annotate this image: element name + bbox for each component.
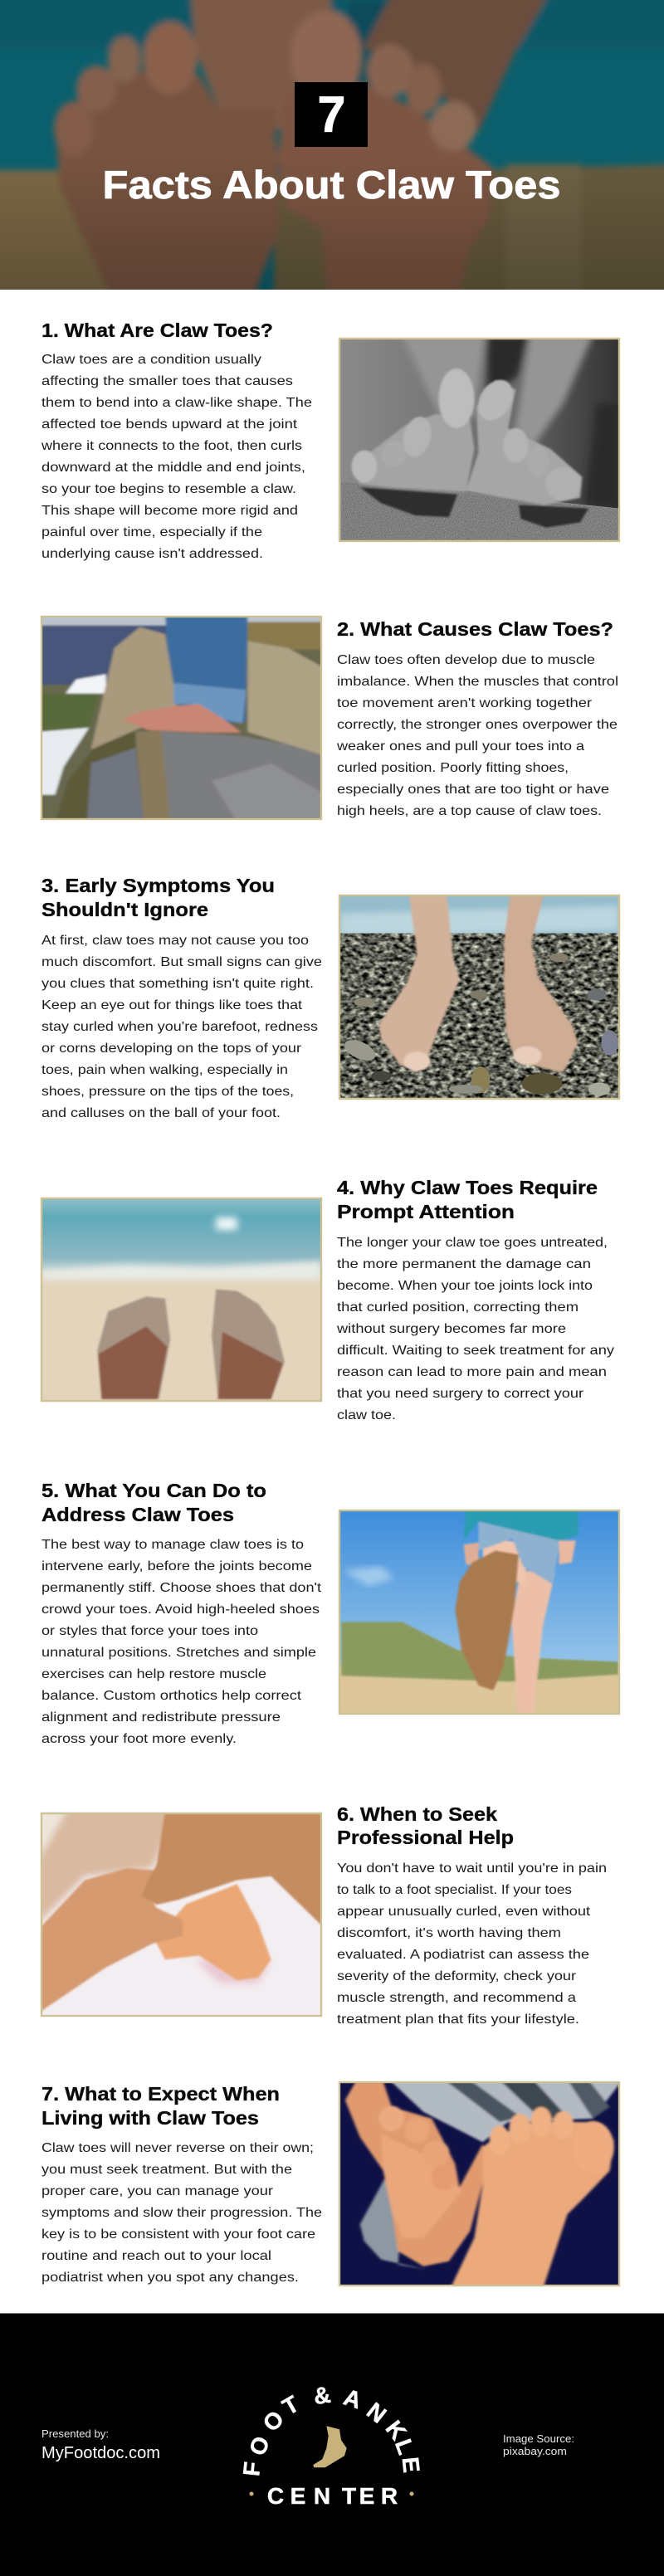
text block 5: exercises can help restore muscle	[42, 1667, 266, 1681]
text block 3: toes, pain when walking, especially in	[42, 1063, 288, 1077]
logo arc text: L	[390, 2436, 419, 2458]
heading 6: Professional Help	[337, 1827, 514, 1848]
logo word center: T	[342, 2483, 356, 2509]
text block 5: alignment and redistribute pressure	[42, 1710, 281, 1725]
text block 4: become. When your toe joints lock into	[337, 1279, 593, 1293]
text block 2: curled position. Poorly fitting shoes,	[337, 761, 569, 775]
photo 1: black and white curled toes on stone	[339, 335, 622, 542]
photo 3: feet standing on pebbles	[339, 893, 619, 1099]
logo arc text	[238, 2382, 424, 2477]
number 7: 7	[318, 86, 345, 143]
image source: pixabay.com	[503, 2446, 567, 2457]
text block 7: Claw toes will never reverse on their own;	[42, 2141, 314, 2155]
text block 5: balance. Custom orthotics help correct	[42, 1689, 302, 1703]
text block 3: stay curled when you're barefoot, redness	[42, 1020, 318, 1034]
photo 5: sandy sole raised on dunes	[339, 1509, 619, 1717]
heading 7: Living with Claw Toes	[42, 2107, 259, 2129]
text block 6: discomfort, it's worth having them	[337, 1926, 561, 1940]
text block 2: Claw toes often develop due to muscle	[337, 653, 595, 667]
photo 7: two child feet on navy background	[339, 2080, 622, 2291]
text block 7: routine and reach out to your local	[42, 2249, 271, 2263]
text block 1	[41, 353, 312, 561]
text block 3: or corns developing on the tops of your	[42, 1042, 302, 1056]
heading 7: 7. What to Expect When	[42, 2083, 280, 2105]
heading 3	[42, 875, 275, 920]
text block 4: difficult. Waiting to seek treatment for any	[337, 1344, 614, 1358]
logo word center: R	[381, 2483, 398, 2509]
text block 6	[337, 1861, 607, 2027]
heading 5: Address Claw Toes	[42, 1504, 234, 1525]
logo word center: E	[359, 2483, 374, 2509]
presented by: MyFootdoc.com	[42, 2444, 160, 2462]
logo arc text: N	[362, 2398, 391, 2428]
text block 7: symptoms and slow their progression. The	[42, 2206, 322, 2220]
text block 5: crowd your toes. Avoid high-heeled shoes	[42, 1603, 320, 1617]
text block 1: This shape will become more rigid and	[42, 504, 298, 518]
text block 3: you clues that something isn't quite right.	[42, 977, 314, 991]
text block 3: much discomfort. But small signs can give	[42, 955, 322, 969]
heading 2: 2. What Causes Claw Toes?	[337, 618, 613, 640]
logo word center	[267, 2483, 398, 2509]
photo 2: foot on a rock in jeans	[38, 613, 326, 822]
panel: section 5 what you can do	[42, 1480, 619, 1746]
logo arc text: E	[398, 2456, 424, 2474]
logo arc text: &	[312, 2382, 332, 2409]
heading 3: Shouldn't Ignore	[42, 899, 208, 920]
text block 4: that curled position, correcting them	[337, 1300, 579, 1315]
text block 3: At first, claw toes may not cause you too	[42, 934, 309, 948]
text block 4: claw toe.	[337, 1408, 396, 1422]
logo arc text: T	[278, 2391, 303, 2420]
text block 2: correctly, the stronger ones overpower the	[337, 718, 618, 732]
text block 6: You don't have to wait until you're in pain	[337, 1861, 607, 1876]
logo word center: C	[267, 2483, 284, 2509]
panel: section 2 what causes claw toes	[38, 613, 618, 822]
text block 4: reason can lead to more pain and mean	[337, 1365, 607, 1379]
footer panel	[0, 2314, 664, 2576]
text block 4: The longer your claw toe goes untreated,	[337, 1236, 608, 1250]
text block 2: imbalance. When the muscles that control	[337, 675, 618, 689]
heading 5	[42, 1480, 266, 1525]
text block 7: proper care, you can manage your	[42, 2184, 274, 2198]
hero banner	[0, 0, 664, 299]
text block 3	[42, 934, 322, 1120]
heading 3: 3. Early Symptoms You	[42, 875, 275, 896]
text block 6: muscle strength, and recommend a	[337, 1991, 576, 2005]
photo 4: sandy feet on the beach	[42, 1198, 321, 1403]
image source	[503, 2433, 574, 2457]
text block 4: without surgery becomes far more	[336, 1322, 566, 1336]
text block 7: podiatrist when you spot any changes.	[42, 2271, 299, 2285]
heading 4	[337, 1177, 598, 1222]
logo: foot and ankle center	[238, 2382, 424, 2509]
heading 6	[337, 1803, 514, 1848]
text block 5: The best way to manage claw toes is to	[42, 1538, 304, 1552]
text block 6: to talk to a foot specialist. If your toes	[337, 1883, 572, 1897]
panel: section 3 early symptoms	[42, 875, 619, 1120]
logo dots	[249, 2491, 413, 2496]
hero photo: two feet soles	[0, 0, 664, 299]
text block 3: shoes, pressure on the tips of the toes,	[42, 1085, 294, 1099]
text block 5: intervene early, before the joints become	[42, 1559, 312, 1573]
text block 6: severity of the deformity, check your	[337, 1969, 577, 1983]
text block 1: them to bend into a claw-like shape. The	[42, 396, 312, 410]
text block 3: and calluses on the ball of your foot.	[42, 1106, 281, 1120]
text block 4	[336, 1236, 614, 1422]
heading 6: 6. When to Seek	[337, 1803, 498, 1825]
text block 6: appear unusually curled, even without	[337, 1905, 591, 1919]
icon: foot silhouette	[313, 2426, 347, 2467]
text block 2: high heels, are a top cause of claw toes.	[337, 804, 602, 818]
text block 2: toe movement aren't working together	[337, 696, 593, 710]
panel: section 6 when to seek help	[38, 1803, 607, 2027]
logo arc text: O	[258, 2406, 289, 2437]
heading 4: 4. Why Claw Toes Require	[337, 1177, 598, 1198]
text block 1: where it connects to the foot, then curls	[41, 439, 302, 453]
text block 2: weaker ones and pull your toes into a	[336, 739, 584, 754]
text block 1: downward at the middle and end joints,	[42, 461, 305, 475]
text block 6: evaluated. A podiatrist can assess the	[337, 1948, 589, 1962]
text block 5: unnatural positions. Stretches and simple	[42, 1646, 316, 1660]
text block 1: Claw toes are a condition usually	[42, 353, 261, 367]
logo word center: N	[314, 2483, 330, 2509]
text block 3: Keep an eye out for things like toes that	[42, 998, 303, 1012]
text block 1: underlying cause isn't addressed.	[42, 547, 263, 561]
text block 1: affected toe bends upward at the joint	[42, 417, 298, 432]
text block 4: the more permanent the damage can	[337, 1257, 591, 1271]
logo arc text: A	[340, 2384, 364, 2413]
title: Facts About Claw Toes	[103, 163, 561, 207]
text block 1: affecting the smaller toes that causes	[42, 374, 293, 388]
text block 1: painful over time, especially if the	[42, 525, 262, 539]
heading 1: 1. What Are Claw Toes?	[42, 320, 273, 341]
text block 4: that you need surgery to correct your	[337, 1387, 584, 1401]
black number box	[295, 82, 368, 147]
text block 2: especially ones that are too tight or have	[337, 783, 609, 797]
logo arc text: O	[244, 2432, 275, 2459]
panel: section 7 what to expect	[42, 2080, 622, 2291]
text block 5: across your foot more evenly.	[42, 1732, 237, 1746]
logo word center: E	[290, 2483, 305, 2509]
presented by: Presented by:	[42, 2428, 109, 2440]
image source: Image Source:	[503, 2433, 574, 2445]
presented by	[42, 2428, 160, 2462]
text block 5: or styles that force your toes into	[42, 1624, 258, 1638]
text block 7	[42, 2141, 322, 2285]
text block 1: so your toe begins to resemble a claw.	[42, 482, 296, 496]
logo arc text: F	[238, 2461, 266, 2477]
text block 5: permanently stiff. Choose shoes that don't	[42, 1581, 322, 1595]
logo arc text: K	[381, 2416, 412, 2445]
text block 6: treatment plan that fits your lifestyle.	[337, 2013, 579, 2027]
heading 4: Prompt Attention	[337, 1201, 515, 1222]
text block 5	[42, 1538, 322, 1746]
photo 6: hands massaging a foot	[38, 1808, 326, 2016]
text block 2	[336, 653, 618, 818]
text block 7: you must seek treatment. But with the	[42, 2163, 292, 2177]
heading 5: 5. What You Can Do to	[42, 1480, 266, 1501]
panel: section 4 prompt attention	[42, 1177, 614, 1422]
heading 7	[42, 2083, 280, 2129]
panel: section 1 what are claw toes	[41, 320, 622, 561]
text block 7: key is to be consistent with your foot care	[42, 2227, 315, 2242]
